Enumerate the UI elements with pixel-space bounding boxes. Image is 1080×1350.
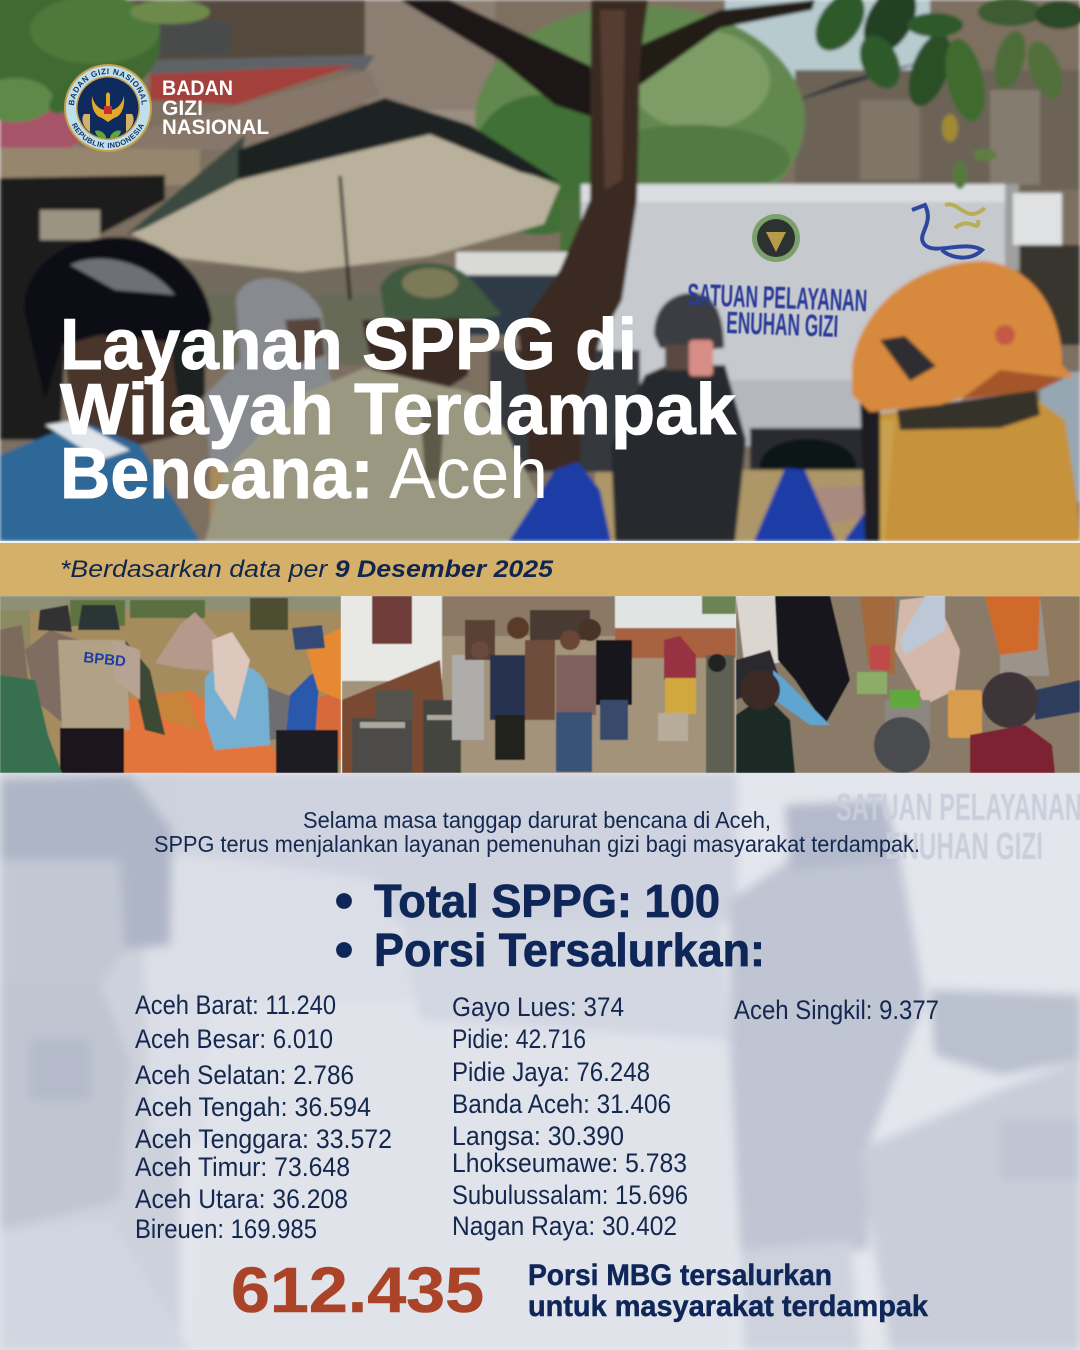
intro text: Selama masa tanggap darurat bencana di Aceh, bbox=[303, 807, 771, 833]
total caption: untuk masyarakat terdampak bbox=[528, 1290, 928, 1323]
left helmet rider bbox=[61, 330, 204, 445]
date band bbox=[0, 543, 1080, 596]
list: column 1: Aceh Utara: 36.208 bbox=[135, 1184, 348, 1214]
list: column 1 bbox=[135, 990, 392, 1244]
logo emblem bbox=[64, 64, 152, 152]
list: column 2: Banda Aceh: 31.406 bbox=[452, 1089, 671, 1119]
list: column 2: Lhokseumawe: 5.783 bbox=[452, 1148, 687, 1178]
small car and panel bbox=[456, 252, 576, 277]
list: column 2: Pidie: 42.716 bbox=[452, 1024, 586, 1054]
list: column 2: Gayo Lues: 374 bbox=[452, 992, 624, 1022]
intro text bbox=[154, 807, 920, 857]
blue raincoat bbox=[0, 425, 200, 541]
middle foliage bbox=[474, 4, 806, 184]
total caption bbox=[528, 1259, 928, 1323]
lower-left structure bbox=[0, 175, 165, 440]
date text: *Berdasarkan data per 9 Desember 2025 bbox=[60, 556, 554, 583]
key figures bbox=[336, 875, 765, 976]
list: column 1: Aceh Selatan: 2.786 bbox=[135, 1060, 354, 1090]
photo: meal distribution bbox=[736, 596, 1080, 773]
phone person bbox=[611, 365, 746, 541]
total number: 612.435 bbox=[231, 1254, 484, 1326]
list: column 3: Aceh Singkil: 9.377 bbox=[734, 995, 939, 1025]
list: column 1: Aceh Besar: 6.010 bbox=[135, 1024, 333, 1054]
umbrella bbox=[130, 135, 560, 272]
truck emblem bbox=[752, 214, 800, 262]
truck lettering: SATUAN PELAYANAN bbox=[687, 277, 868, 318]
list: column 2: Subulussalam: 15.696 bbox=[452, 1180, 688, 1210]
photo: children in flood bbox=[342, 596, 736, 773]
houses bbox=[128, 0, 366, 61]
logo wordmark: GIZI bbox=[162, 97, 203, 120]
orange helmet person bbox=[1040, 372, 1080, 502]
truck lettering: ENUHAN GIZI bbox=[726, 305, 839, 344]
key figures: Porsi Tersalurkan: bbox=[374, 924, 765, 976]
panel: faded background photo bbox=[0, 773, 1080, 1350]
truck bbox=[578, 200, 1008, 386]
truck lettering bbox=[687, 282, 868, 338]
tree bbox=[400, 0, 596, 118]
logo wordmark: NASIONAL bbox=[162, 116, 269, 139]
list: column 2: Pidie Jaya: 76.248 bbox=[452, 1057, 650, 1087]
white divider bbox=[0, 541, 1080, 543]
list: column 1: Aceh Timur: 73.648 bbox=[135, 1152, 350, 1182]
key figures: Total SPPG: 100 bbox=[374, 875, 720, 927]
logo emblem: BADAN GIZI NASIONAL bbox=[68, 68, 147, 106]
truck ornament bbox=[912, 204, 985, 258]
intro text: SPPG terus menjalankan layanan pemenuhan gizi bagi masyarakat terdampak. bbox=[154, 831, 920, 857]
title bbox=[60, 305, 737, 514]
list: column 2 bbox=[452, 992, 688, 1241]
list: column 1: Aceh Tengah: 36.594 bbox=[135, 1092, 371, 1122]
title: Layanan SPPG di bbox=[60, 305, 637, 385]
title: Bencana: Aceh bbox=[60, 434, 548, 514]
title: Wilayah Terdampak bbox=[60, 370, 737, 450]
faded truck lettering bbox=[836, 794, 1080, 860]
top-right leaves bbox=[805, 0, 1080, 189]
photo: BPBD rescue boat bbox=[0, 596, 341, 773]
logo emblem: REPUBLIK INDONESIA bbox=[72, 122, 144, 148]
logo wordmark bbox=[162, 77, 269, 139]
list: column 2: Langsa: 30.390 bbox=[452, 1121, 624, 1151]
panel: hero photo bbox=[0, 0, 1080, 541]
list: column 1: Aceh Tenggara: 33.572 bbox=[135, 1124, 392, 1154]
list: column 1: Bireuen: 169.985 bbox=[135, 1214, 317, 1244]
blue bags bbox=[509, 462, 611, 541]
list: column 2: Nagan Raya: 30.402 bbox=[452, 1211, 677, 1241]
logo wordmark: BADAN bbox=[162, 77, 233, 100]
top-left foliage bbox=[0, 0, 160, 107]
list: column 1: Aceh Barat: 11.240 bbox=[135, 990, 336, 1020]
total caption: Porsi MBG tersalurkan bbox=[528, 1259, 832, 1292]
hooded person bbox=[205, 278, 340, 470]
soldier bbox=[380, 263, 502, 320]
photo: BPBD rescue boat: BPBD bbox=[83, 649, 127, 670]
